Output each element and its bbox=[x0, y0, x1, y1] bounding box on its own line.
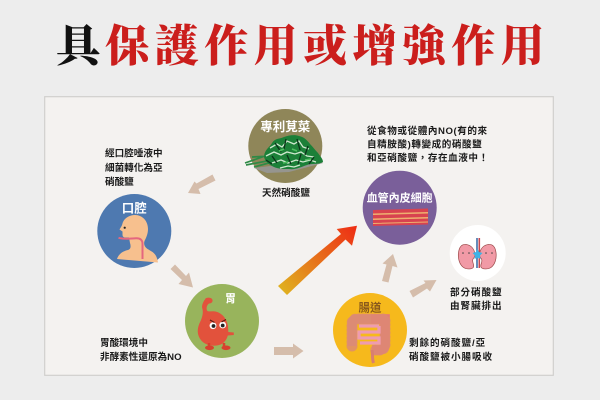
text: amaranth caption: 天然硝酸鹽 bbox=[262, 187, 310, 199]
title: 具保護作用或增強作用 bbox=[56, 22, 550, 71]
arrow: stomach to endothelium gradient bbox=[278, 226, 357, 295]
text: vessel caption: 自精胺酸)轉變成的硝酸鹽 bbox=[367, 138, 482, 150]
text: mouth caption: 細菌轉化為亞 bbox=[105, 162, 163, 174]
text: stomach caption: 胃酸環境中 bbox=[100, 337, 148, 349]
text: intestine caption: 硝酸鹽被小腸吸收 bbox=[409, 351, 493, 363]
text: kidney caption: 由腎臟排出 bbox=[450, 300, 502, 312]
arrow: intestine to kidney bbox=[410, 280, 436, 298]
icon: amaranth circle: 專利莧菜 bbox=[260, 119, 311, 134]
icon: stomach circle bbox=[185, 284, 259, 358]
text: mouth caption: 經口腔唾液中 bbox=[105, 148, 163, 160]
arrow: intestine to endothelium bbox=[382, 254, 398, 282]
arrow: stomach to intestine bbox=[274, 344, 304, 358]
arrow: amaranth to mouth bbox=[188, 174, 216, 194]
icon: intestine circle: 腸道 bbox=[358, 300, 382, 314]
icon: endothelial cell circle: 血管內皮細胞 bbox=[367, 190, 433, 204]
text: stomach caption: 非酵素性還原為NO bbox=[100, 351, 182, 363]
icon: kidneys circle bbox=[450, 225, 506, 281]
text: kidney caption: 部分硝酸鹽 bbox=[450, 286, 502, 298]
icon: mouth circle bbox=[97, 194, 171, 268]
arrow: mouth to stomach bbox=[170, 264, 193, 288]
text: vessel caption: 和亞硝酸鹽，存在血液中！ bbox=[367, 152, 489, 164]
icon: stomach circle: 胃 bbox=[225, 292, 236, 305]
panel: diagram background bbox=[45, 97, 553, 375]
text: intestine caption: 剩餘的硝酸鹽/亞 bbox=[409, 337, 486, 349]
text: mouth caption: 硝酸鹽 bbox=[105, 176, 134, 188]
icon: amaranth circle bbox=[245, 109, 323, 183]
icon: intestine circle bbox=[333, 293, 407, 367]
text: vessel caption: 從食物或從體內NO(有的來 bbox=[367, 125, 488, 137]
icon: endothelial cell circle bbox=[363, 171, 437, 245]
icon: mouth circle: 口腔 bbox=[122, 200, 147, 216]
